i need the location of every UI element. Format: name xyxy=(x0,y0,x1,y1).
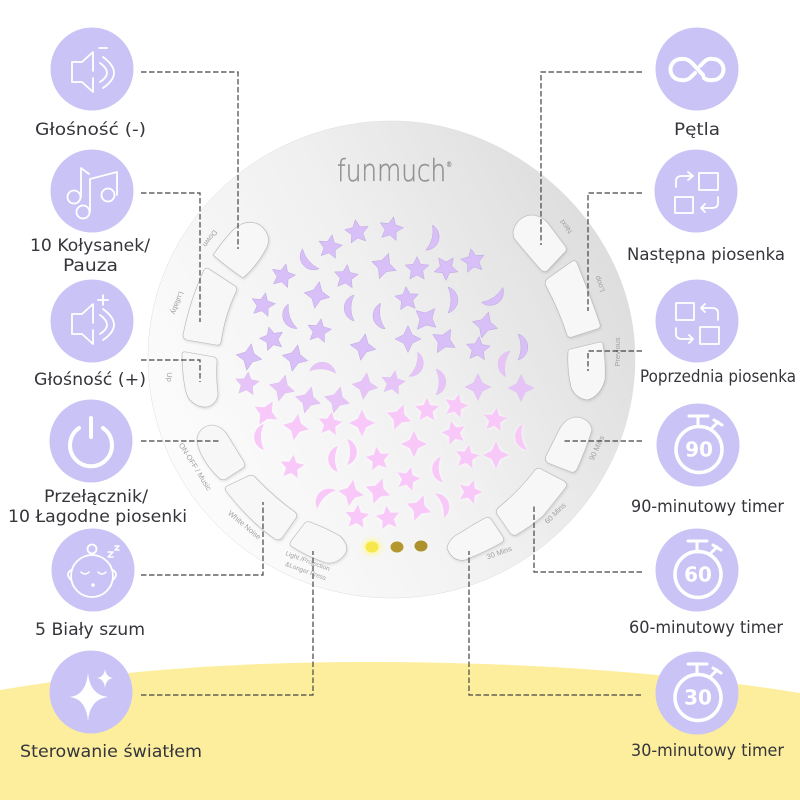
callout line: loop xyxy=(541,72,642,245)
brand logo: funmuch xyxy=(337,154,469,189)
icon: next song xyxy=(654,150,738,232)
label: light control: Sterowanie światłem xyxy=(20,742,202,762)
label: lullabies and pause: 10 Kołysanek/ xyxy=(30,236,150,256)
icon: 90 minute timer: 90 xyxy=(685,438,713,462)
callout line: volume down xyxy=(141,72,238,249)
button captions: &Longer Press xyxy=(284,561,328,582)
label: 60 minute timer: 60-minutowy timer xyxy=(629,618,783,638)
button captions: 60 Mins xyxy=(543,501,568,526)
device buttons xyxy=(182,215,605,563)
button captions xyxy=(165,217,622,582)
button captions: Previous xyxy=(613,337,622,367)
icon: loop xyxy=(656,28,738,110)
icon: previous song xyxy=(656,280,738,362)
label: 90 minute timer: 90-minutowy timer xyxy=(631,497,784,517)
label: white noise: 5 Biały szum xyxy=(35,620,145,640)
label: lullabies and pause: Pauza xyxy=(63,256,118,276)
label: lullabies and pause xyxy=(30,236,150,276)
yellow background wave xyxy=(0,662,800,800)
icon: 30 minute timer: 30 xyxy=(684,686,712,710)
callout line: 90 minute timer xyxy=(564,440,642,442)
icon: 60 minute timer: 60 xyxy=(684,562,712,586)
icon: 30 minute timer xyxy=(656,652,738,734)
callout line: 60 minute timer xyxy=(534,506,642,572)
callout line: previous song xyxy=(588,351,642,371)
callout line: white noise xyxy=(141,502,263,575)
button captions: Up xyxy=(165,372,174,382)
callout line: lullaby xyxy=(141,193,200,322)
button captions: ON-OFF / Music xyxy=(177,441,214,492)
callout line: light control xyxy=(141,551,313,695)
icon: music notes xyxy=(50,150,134,232)
label: volume up: Głośność (+) xyxy=(34,370,146,390)
button captions: Light /Projection xyxy=(284,550,331,573)
label: 30 minute timer: 30-minutowy timer xyxy=(631,741,784,761)
label: switch and soothing songs: Przełącznik/ xyxy=(44,487,148,507)
label: next song: Następna piosenka xyxy=(627,245,785,265)
button captions: Loop xyxy=(593,274,607,293)
brand logo: ® xyxy=(446,161,452,169)
icon: power xyxy=(50,400,132,482)
button captions: Lullaby xyxy=(169,290,186,316)
label: volume down: Głośność (-) xyxy=(35,120,146,140)
label: switch and soothing songs: 10 Łagodne piosenki xyxy=(8,507,187,527)
button captions: Next xyxy=(557,217,574,235)
icon: sparkles xyxy=(50,650,132,734)
icon: volume down xyxy=(50,28,134,110)
icon: sleeping baby xyxy=(52,528,134,612)
icon: 60 minute timer xyxy=(656,528,738,612)
button captions: White Noise xyxy=(226,509,263,542)
icon: 90 minute timer xyxy=(656,404,740,486)
button captions: 30 Mins xyxy=(485,544,513,561)
label: loop: Pętla xyxy=(674,120,720,140)
star and moon projection pattern xyxy=(234,214,534,530)
device disc xyxy=(148,121,635,598)
callout line: 30 minute timer xyxy=(469,551,641,695)
button captions: Down xyxy=(201,228,219,249)
button captions: 90 Mins xyxy=(587,434,606,462)
callout line: next song xyxy=(588,193,642,311)
icon: volume up xyxy=(50,280,134,362)
label: switch and soothing songs xyxy=(8,487,187,527)
callout line: volume up xyxy=(141,360,200,382)
indicator LEDs xyxy=(363,539,428,555)
callout line: power xyxy=(141,440,219,442)
